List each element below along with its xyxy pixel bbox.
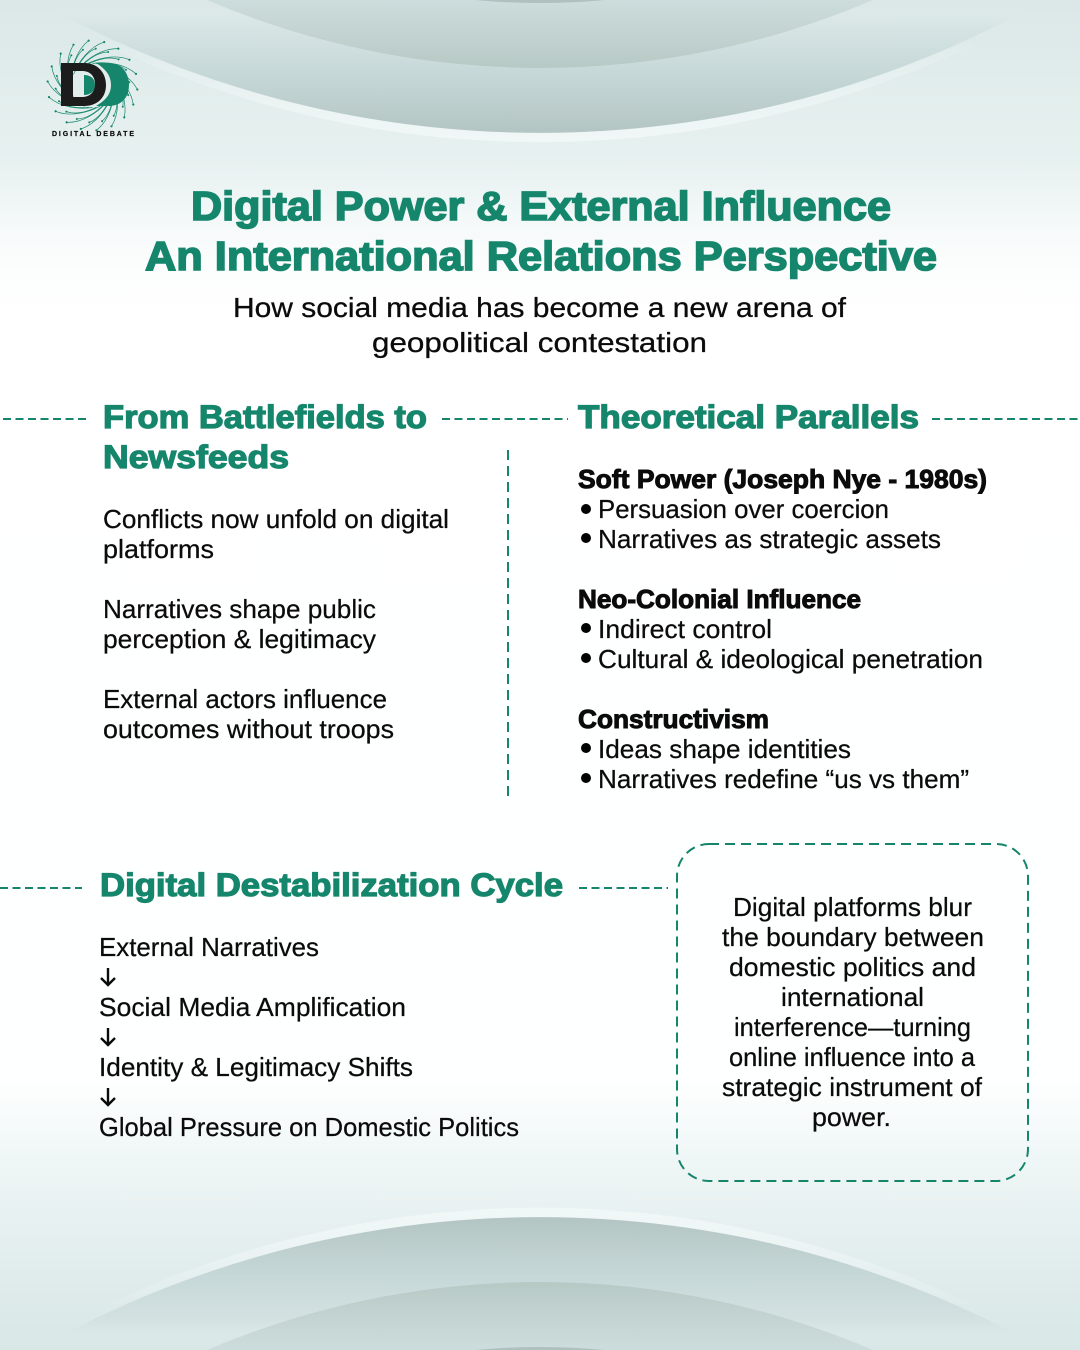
section dashed rules — [0, 419, 1080, 888]
callout text: power. — [812, 1102, 891, 1132]
step: global pressure on domestic politics: Global Pressure on Domestic Politics — [99, 1112, 519, 1142]
text block: conflicts: Conflicts now unfold on digital — [103, 504, 449, 534]
subtitle: geopolitical contestation — [372, 327, 707, 358]
icon: circuit swirl — [43, 36, 142, 135]
callout text: international — [781, 982, 924, 1012]
text block: neo-colonial influence: Neo-Colonial Influence — [578, 584, 861, 614]
text block: soft power: Narratives as strategic assets — [598, 524, 941, 554]
subtitle — [233, 292, 846, 358]
decorative top arcs — [21, 0, 1059, 142]
text block: external actors — [103, 684, 394, 744]
callout text: the boundary between — [722, 922, 984, 952]
text block: soft power: Persuasion over coercion — [598, 494, 889, 524]
decorative bottom arcs — [21, 1208, 1059, 1350]
panel: from battlefields to newsfeeds — [103, 399, 449, 744]
text block: conflicts: platforms — [103, 534, 214, 564]
text block: narratives: perception & legitimacy — [103, 624, 376, 654]
callout text: domestic politics and — [729, 952, 976, 982]
text block: external actors: External actors influence — [103, 684, 387, 714]
subtitle: How social media has become a new arena of — [233, 292, 846, 323]
heading: from battlefields to newsfeeds — [103, 399, 427, 475]
callout text: Digital platforms blur — [733, 892, 972, 922]
heading: theoretical parallels: Theoretical Parallels — [578, 399, 919, 435]
title: An International Relations Perspective — [145, 233, 937, 279]
arrow: down — [101, 968, 115, 985]
text block: neo-colonial influence — [578, 584, 983, 674]
text block: constructivism: Constructivism — [578, 704, 769, 734]
vertical dashed divider — [507, 450, 509, 799]
arrow: down — [101, 1088, 115, 1105]
icon: black D — [61, 63, 106, 106]
callout dashed frame — [677, 844, 1028, 1181]
step: social media amplification: Social Media Amplification — [99, 992, 406, 1022]
icon: green D — [84, 63, 129, 106]
title: Digital Power & External Influence — [191, 183, 891, 229]
panel: theoretical parallels — [578, 399, 987, 794]
text block: external actors: outcomes without troops — [103, 714, 394, 744]
text block: soft power — [578, 464, 987, 554]
heading: digital destabilization cycle: Digital Destabilization Cycle — [100, 867, 563, 903]
panel: digital destabilization cycle — [99, 867, 563, 1142]
heading: from battlefields to newsfeeds: Newsfeeds — [103, 439, 289, 475]
text block: neo-colonial influence: Cultural & ideological penetration — [598, 644, 983, 674]
title — [145, 183, 937, 279]
logo: Digital Debate — [43, 36, 142, 138]
text block: narratives: Narratives shape public — [103, 594, 376, 624]
logo wordmark: DIGITAL DEBATE — [52, 131, 134, 138]
step: identity and legitimacy shifts: Identity & Legitimacy Shifts — [99, 1052, 413, 1082]
text block: constructivism: Narratives redefine “us vs them” — [598, 764, 969, 794]
text block: constructivism: Ideas shape identities — [598, 734, 851, 764]
callout text — [722, 892, 984, 1132]
callout text: strategic instrument of — [722, 1072, 983, 1102]
text block: constructivism — [578, 704, 969, 794]
arrow: down — [101, 1028, 115, 1045]
text block: conflicts — [103, 504, 449, 564]
step: external narratives: External Narratives — [99, 932, 319, 962]
text block: soft power: Soft Power (Joseph Nye - 1980s) — [578, 464, 987, 494]
text block: neo-colonial influence: Indirect control — [598, 614, 772, 644]
text block: narratives — [103, 594, 376, 654]
heading: from battlefields to newsfeeds: From Battlefields to — [103, 399, 427, 435]
callout text: online influence into a — [729, 1042, 976, 1072]
callout — [677, 844, 1028, 1181]
callout text: interference—turning — [734, 1012, 971, 1042]
